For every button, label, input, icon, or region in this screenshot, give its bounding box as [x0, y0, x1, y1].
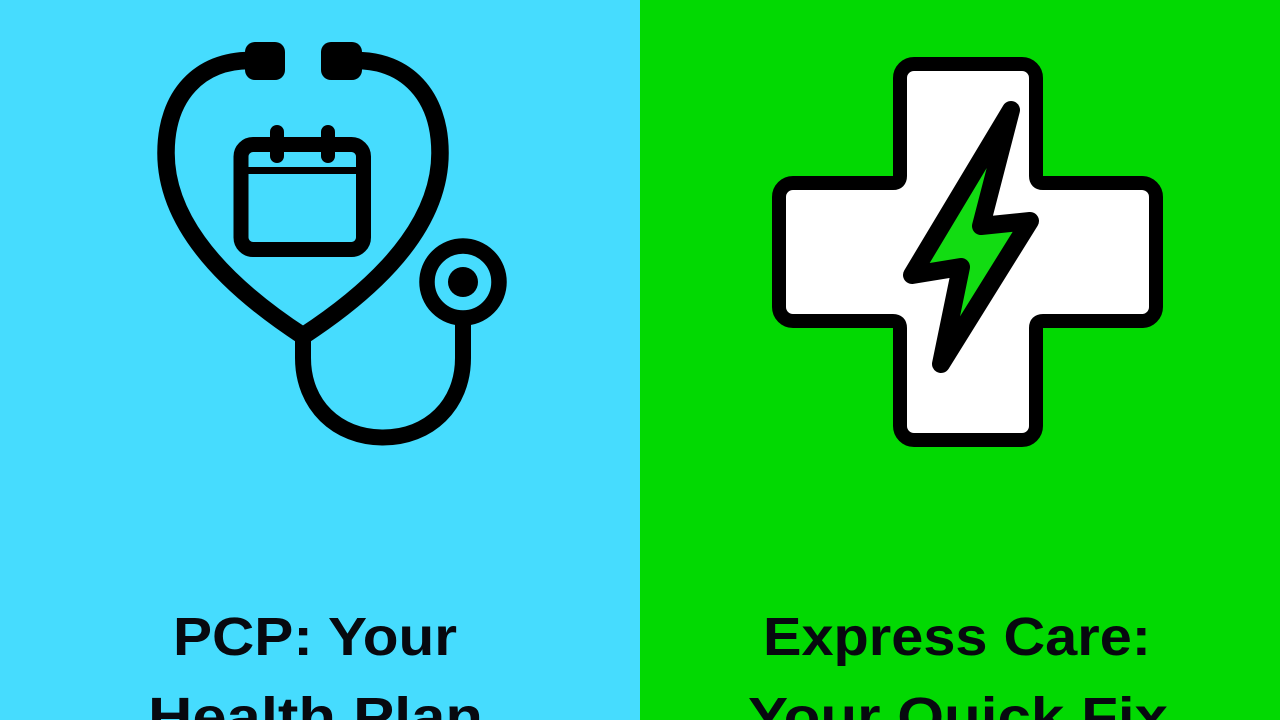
chest piece [427, 246, 499, 318]
chest piece centre [448, 267, 478, 297]
heading: PCP [148, 607, 483, 720]
icon: medical cross with lightning bolt [779, 64, 1156, 440]
heading: Express Care [748, 607, 1168, 720]
calendar body [241, 144, 364, 250]
icon: stethoscope with calendar [166, 42, 499, 438]
panel: Express Care [640, 0, 1280, 720]
panel: PCP [0, 0, 640, 720]
calendar left ring [270, 132, 284, 156]
right earpiece [321, 42, 362, 80]
heading: Express Care: Express Care: [763, 607, 1151, 667]
heading: PCP: PCP: Your [173, 607, 457, 667]
white cross [779, 64, 1156, 440]
stethoscope heart-shaped tubing [166, 60, 440, 336]
calendar right ring [321, 132, 335, 156]
calendar header line [242, 167, 363, 174]
left earpiece [245, 42, 285, 80]
lower tube [303, 318, 463, 438]
lightning bolt [912, 110, 1030, 364]
